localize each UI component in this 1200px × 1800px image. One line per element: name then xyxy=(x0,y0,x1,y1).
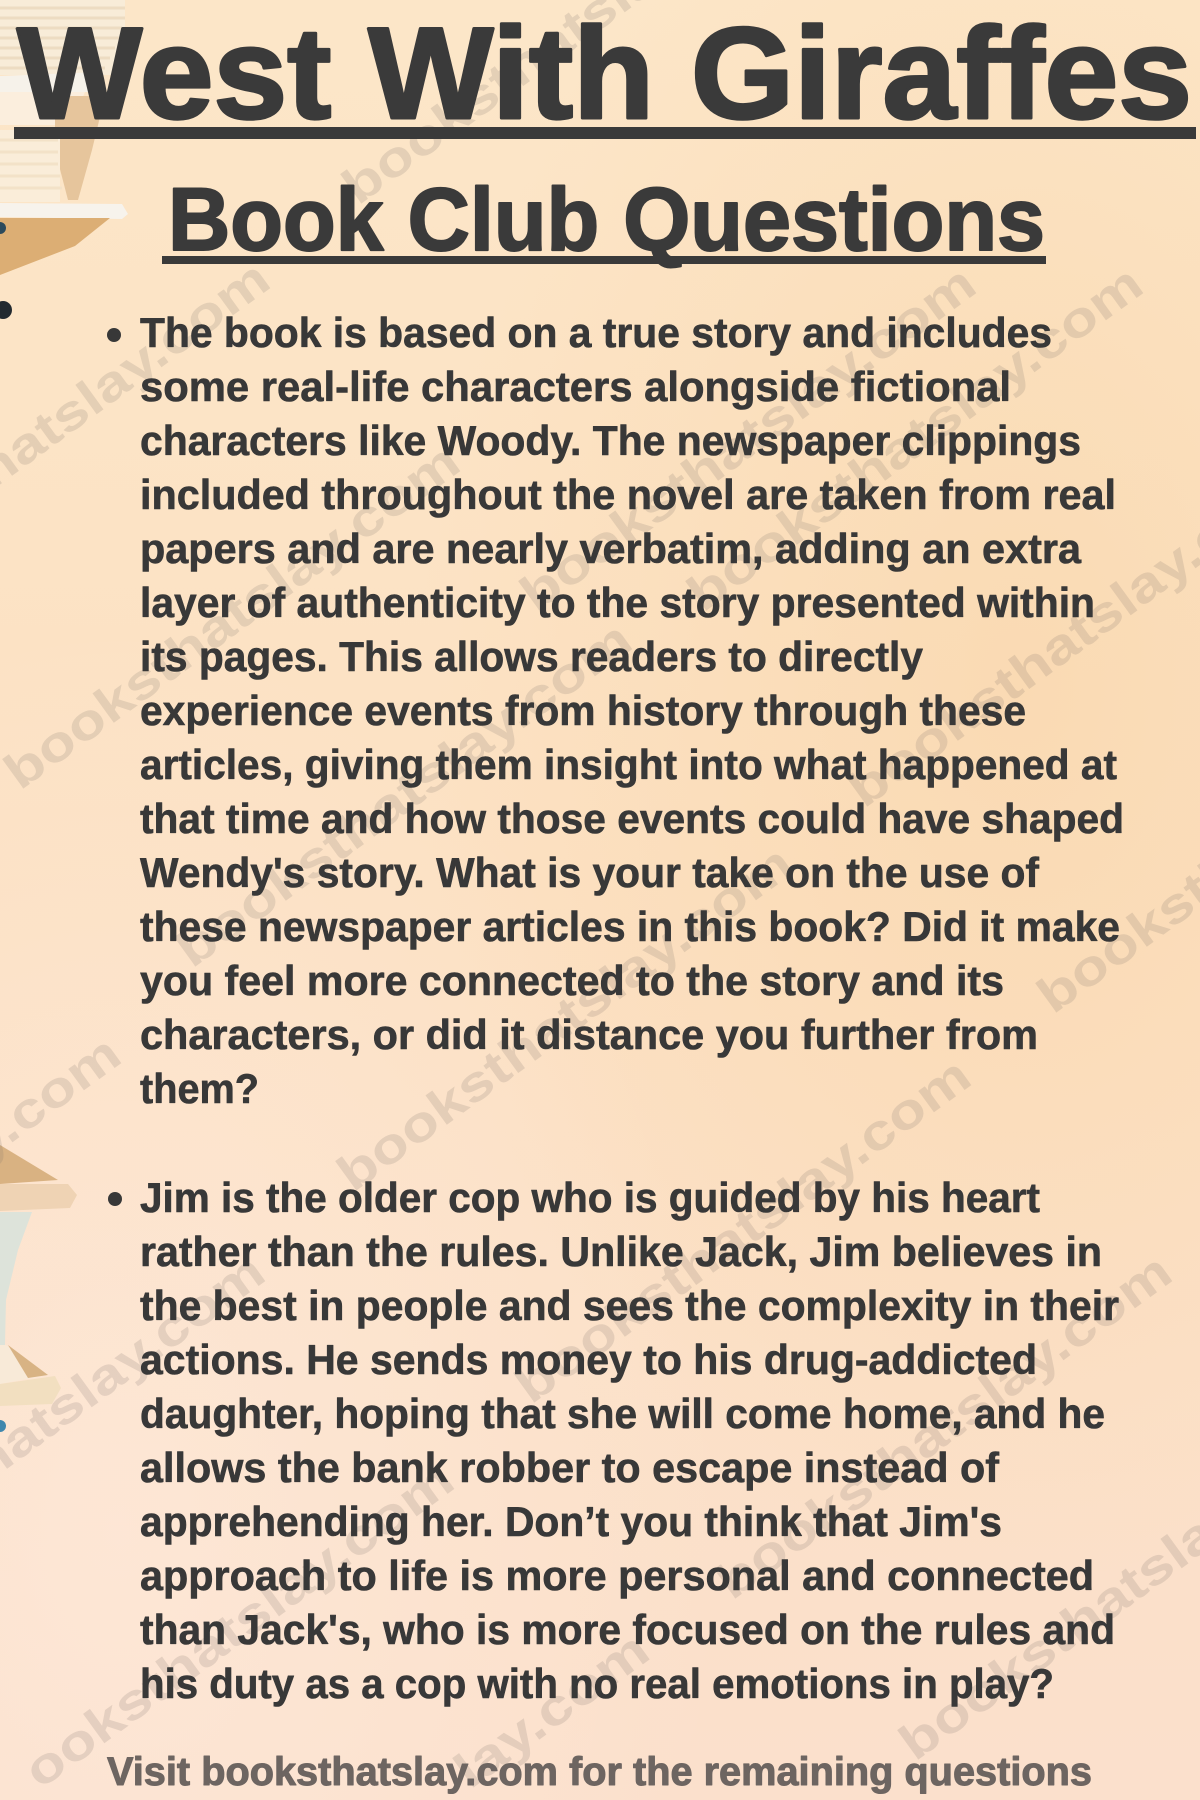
watermarks: ooksthatslay.com xyxy=(14,1450,464,1799)
watermarks: booksthatslay.com xyxy=(166,610,642,978)
watermarks: booksthatslay.com xyxy=(706,1242,1182,1610)
footer call to action: Visit booksthatslay.com for the remaining questions xyxy=(107,1750,1092,1794)
question 1 text block: articles, giving them insight into what happened at xyxy=(140,741,1117,788)
question 1 text block: these newspaper articles in this book? Did it make xyxy=(140,903,1120,950)
decoration: top book stack xyxy=(0,0,128,319)
question 2 text block: approach to life is more personal and connected xyxy=(140,1552,1094,1599)
question 2 text block: daughter, hoping that she will come home, and he xyxy=(140,1390,1105,1437)
decoration: lower book stack xyxy=(0,1145,77,1432)
question 1 text block: layer of authenticity to the story presented within xyxy=(140,579,1095,626)
question 2 text block xyxy=(108,1174,1119,1707)
question 1 text block: characters like Woody. The newspaper clippings xyxy=(140,417,1081,464)
watermarks: booksthatslay.com xyxy=(0,432,470,800)
watermarks: booksthatslay.com xyxy=(510,254,986,622)
question 2 text block: apprehending her. Don’t you think that Jim's xyxy=(140,1498,1002,1545)
question 1 text block: you feel more connected to the story and its xyxy=(140,957,1004,1004)
watermarks: booksthatslay.com xyxy=(677,254,1153,622)
question 2 text block: Jim is the older cop who is guided by his heart xyxy=(140,1174,1040,1221)
question 2 text block: actions. He sends money to his drug-addicted xyxy=(140,1336,1037,1383)
question 2 text block: the best in people and sees the complexity in their xyxy=(140,1282,1119,1329)
question 2 text block: rather than the rules. Unlike Jack, Jim believes in xyxy=(140,1228,1102,1275)
question 2 text block: his duty as a cop with no real emotions in play? xyxy=(140,1660,1054,1707)
question 1 text block: that time and how those events could have shaped xyxy=(140,795,1124,842)
question 1 text block: some real-life characters alongside fictional xyxy=(140,363,1011,410)
question 1 text block: experience events from history through these xyxy=(140,687,1026,734)
question 1 text block: The book is based on a true story and includes xyxy=(140,309,1052,356)
question 1 text block: included throughout the novel are taken from real xyxy=(140,471,1116,518)
question 1 text block: them? xyxy=(140,1065,259,1112)
watermarks: booksthatslay.com xyxy=(505,1046,981,1414)
question 1 text block: characters, or did it distance you further from xyxy=(140,1011,1038,1058)
subtitle: Book Club Questions xyxy=(168,169,1045,269)
watermarks: booksthatslay.com xyxy=(327,834,803,1202)
watermarks: lay.com xyxy=(444,1621,659,1799)
question 2 text block: allows the bank robber to escape instead of xyxy=(140,1444,1000,1491)
question 1 text block xyxy=(107,309,1124,1112)
title: West With Giraffes xyxy=(17,0,1192,146)
question 2 text block: than Jack's, who is more focused on the rules and xyxy=(140,1606,1115,1653)
question 1 text block: its pages. This allows readers to directly xyxy=(140,633,924,680)
question 1 text block: papers and are nearly verbatim, adding an extra xyxy=(140,525,1082,572)
question 1 text block: Wendy's story. What is your take on the use of xyxy=(140,849,1040,896)
